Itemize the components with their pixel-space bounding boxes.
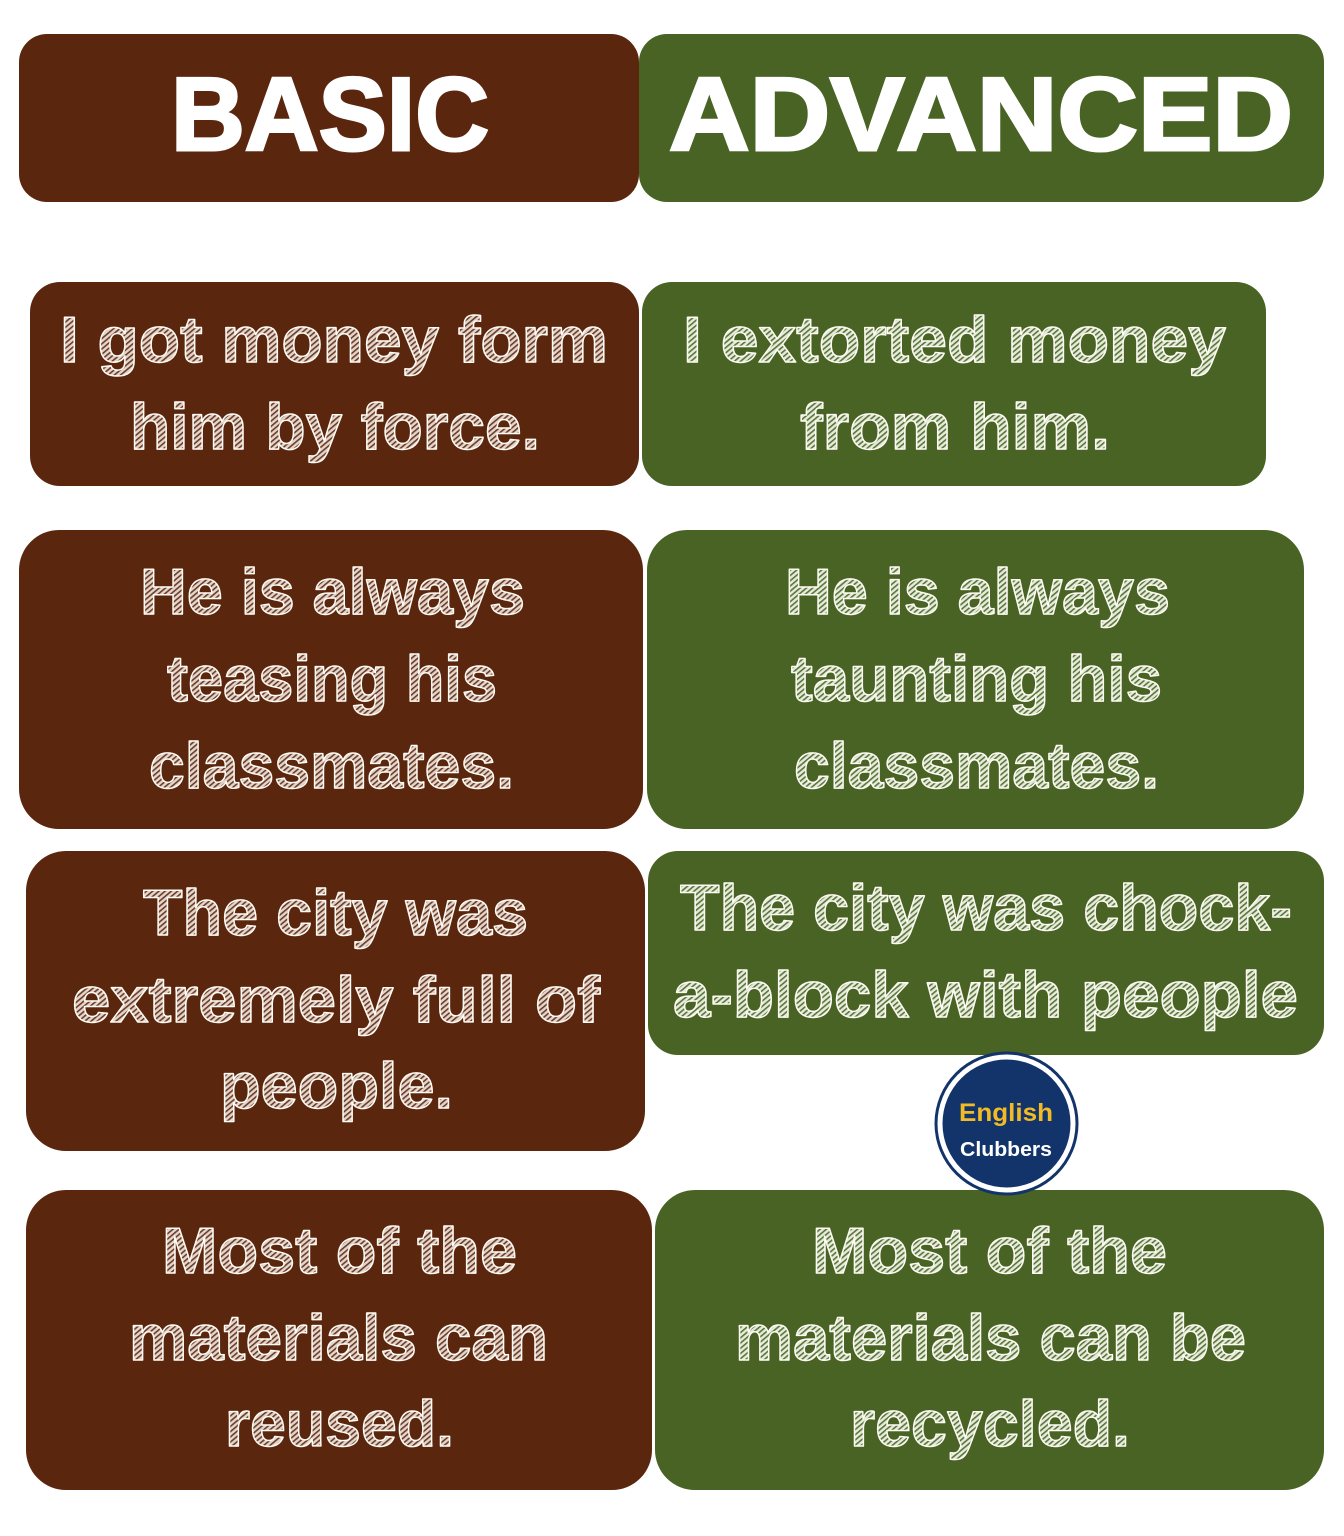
- panel: basic sentence 2: classmates.: [149, 729, 514, 802]
- panel: basic sentence 1: [30, 282, 639, 486]
- panel: basic sentence 4: [26, 1190, 652, 1490]
- panel: advanced sentence 4: recycled.: [850, 1387, 1130, 1460]
- panel: advanced sentence 2: He is always: [785, 555, 1170, 628]
- panel: basic sentence 3: extremely full of: [72, 963, 600, 1036]
- header: ADVANCED: ADVANCED: [669, 57, 1293, 173]
- panel: advanced sentence 4: [655, 1190, 1324, 1490]
- panel: advanced sentence 4: Most of the: [812, 1214, 1167, 1287]
- panel: basic sentence 4: reused.: [225, 1387, 454, 1460]
- header: BASIC: BASIC: [171, 57, 489, 173]
- panel: advanced sentence 1: from him.: [800, 390, 1110, 463]
- header: ADVANCED: [639, 34, 1324, 202]
- panel: basic sentence 3: [26, 851, 645, 1151]
- panel: basic sentence 3: The city was: [143, 876, 528, 949]
- panel: advanced sentence 2: taunting his: [791, 642, 1162, 715]
- panel: basic sentence 1: him by force.: [130, 390, 540, 463]
- logo: English Clubbers: English: [959, 1099, 1053, 1127]
- panel: basic sentence 2: He is always: [140, 555, 525, 628]
- header: BASIC: [19, 34, 639, 202]
- panel: basic sentence 3: people.: [220, 1049, 453, 1122]
- panel: basic sentence 4: Most of the: [162, 1214, 517, 1287]
- panel: advanced sentence 2: [647, 530, 1304, 829]
- panel: advanced sentence 1: [642, 282, 1266, 486]
- panel: advanced sentence 3: [648, 851, 1324, 1055]
- panel: advanced sentence 2: classmates.: [794, 729, 1159, 802]
- panel: advanced sentence 1: I extorted money: [683, 303, 1226, 376]
- panel: basic sentence 2: teasing his: [167, 642, 497, 715]
- logo: English Clubbers: Clubbers: [960, 1139, 1052, 1161]
- panel: advanced sentence 4: materials can be: [735, 1301, 1246, 1374]
- panel: advanced sentence 3: The city was chock-: [680, 871, 1292, 944]
- panel: basic sentence 1: I got money form: [60, 303, 608, 376]
- logo: English Clubbers: [934, 1052, 1078, 1196]
- panel: advanced sentence 3: a-block with people: [673, 958, 1298, 1031]
- panel: basic sentence 4: materials can: [129, 1301, 548, 1374]
- panel: basic sentence 2: [19, 530, 643, 829]
